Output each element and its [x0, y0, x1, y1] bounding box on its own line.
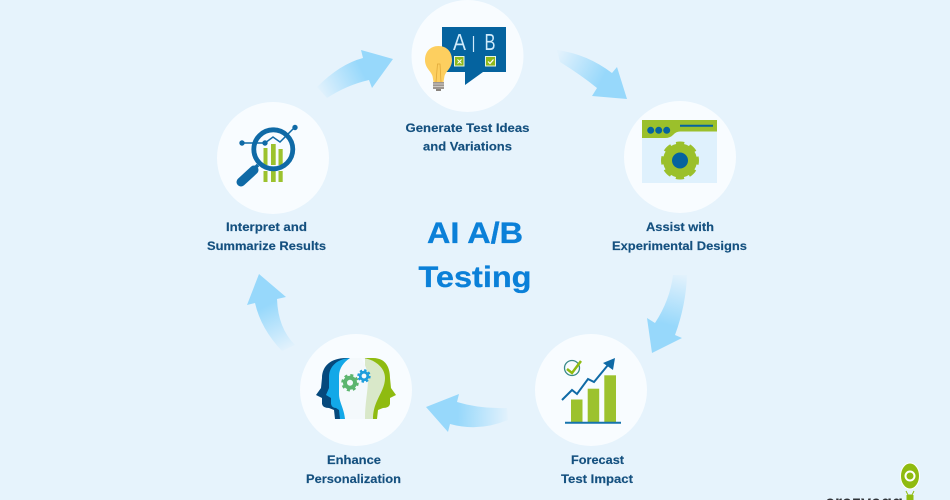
arrow: enhance to interpret	[247, 274, 295, 351]
icon: A/B speech bubble with light bulb: B	[484, 29, 496, 55]
label: enhance personalization: Enhance	[327, 453, 381, 467]
label: enhance personalization: Personalization	[306, 472, 401, 486]
label: generate test ideas: Generate Test Ideas	[406, 121, 530, 135]
label: assist with experimental designs	[612, 220, 747, 253]
icon circle: generate	[412, 0, 524, 112]
icon circle: forecast	[535, 334, 647, 446]
icon circle: interpret	[217, 102, 329, 214]
label: enhance personalization	[306, 453, 401, 486]
label: interpret and summarize results	[207, 220, 326, 253]
logo: crazyegg balloon and wordmark	[825, 463, 920, 500]
label: generate test ideas: and Variations	[423, 140, 512, 154]
panel: interpret and summarize results	[207, 102, 329, 253]
label: interpret and summarize results: Interpret and	[226, 220, 307, 234]
arrow: assist to forecast	[647, 275, 687, 353]
label: generate test ideas	[406, 121, 530, 154]
icon: A/B speech bubble with light bulb: A	[453, 29, 467, 55]
label: forecast test impact	[561, 453, 633, 486]
icon: facing heads with gears	[316, 358, 396, 419]
center title	[418, 217, 532, 294]
icon: growth bar chart with arrow	[562, 358, 621, 423]
arrow: interpret to generate	[317, 50, 393, 98]
center title: AI A/B	[427, 217, 523, 250]
icon circle: assist	[624, 101, 736, 213]
panel: assist with experimental designs	[612, 101, 747, 253]
icon circle: enhance	[300, 334, 412, 446]
label: interpret and summarize results: Summarize Results	[207, 239, 326, 253]
label: forecast test impact: Forecast	[571, 453, 624, 467]
label: assist with experimental designs: Experimental Designs	[612, 239, 747, 253]
panel: forecast test impact	[535, 334, 647, 486]
arrow: forecast to enhance	[426, 394, 508, 432]
center title: Testing	[418, 261, 532, 294]
arrow: generate to assist	[557, 50, 627, 99]
icon: A/B speech bubble with light bulb	[425, 27, 506, 91]
panel: generate test ideas	[406, 0, 530, 154]
label: assist with experimental designs: Assist with	[646, 220, 714, 234]
icon: browser window with gear	[642, 120, 717, 183]
label: forecast test impact: Test Impact	[561, 472, 633, 486]
panel: enhance personalization	[300, 334, 412, 486]
icon: magnifier over chart	[239, 125, 298, 182]
